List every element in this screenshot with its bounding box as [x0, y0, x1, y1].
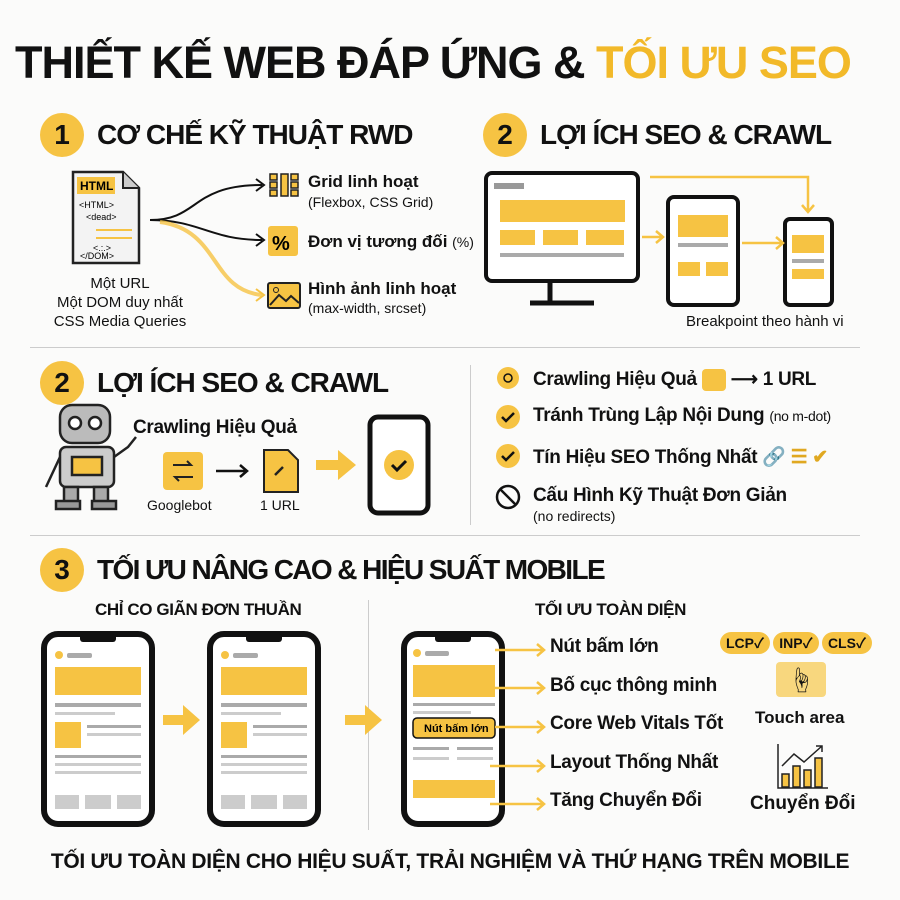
benefits list: Tín Hiệu SEO Thống Nhất 🔗 ☰ ✔ [533, 447, 828, 468]
chart icon [777, 744, 828, 789]
phones comparison: Nút bấm lớn [424, 723, 489, 735]
subheadings: CHỈ CO GIÃN ĐƠN THUẦN [95, 600, 301, 619]
text: 1 URL [260, 497, 300, 513]
section 1 caption [54, 275, 186, 330]
feature labels: Tăng Chuyển Đổi [550, 790, 702, 811]
googlebot icon [163, 452, 203, 490]
feature labels: Nút bấm lớn [550, 636, 658, 657]
icon: html document: </DOM> [80, 251, 114, 261]
icon: html document: HTML [80, 179, 113, 193]
icon image [268, 283, 300, 308]
benefits list: Tránh Trùng Lập Nội Dung (no m-dot) [533, 405, 831, 426]
benefits list: Crawling Hiệu Quả ⟶ 1 URL [533, 369, 816, 390]
breakpoint caption: Breakpoint theo hành vi [686, 313, 844, 330]
feature labels: Core Web Vitals Tốt [550, 713, 723, 734]
icon: html document: <.:.> [93, 243, 111, 253]
section 3 heading [40, 548, 605, 592]
rwd items: (Flexbox, CSS Grid) [308, 194, 433, 210]
section 1 caption: CSS Media Queries [54, 313, 186, 330]
section 1 heading: CƠ CHẾ KỸ THUẬT RWD [97, 119, 412, 150]
rwd items: Hình ảnh linh hoạt [308, 279, 456, 298]
feature labels [550, 636, 724, 811]
devices [484, 171, 834, 307]
text: Crawling Hiệu Quả [133, 417, 297, 438]
benefits list: Cấu Hình Kỹ Thuật Đơn Giản [533, 485, 787, 506]
feature arrows [490, 643, 546, 811]
metrics pills: LCP✓ [726, 635, 764, 651]
section 2 heading left: LỢI ÍCH SEO & CRAWL [97, 367, 388, 398]
touch icon: ☝ [788, 666, 814, 696]
text: Chuyển Đổi [750, 793, 856, 814]
section 2 heading right: LỢI ÍCH SEO & CRAWL [540, 119, 831, 150]
url doc icon [264, 450, 298, 492]
metrics pills: CLS✓ [828, 635, 866, 651]
rwd items: Đơn vị tương đối (%) [308, 232, 474, 251]
phone check [370, 417, 428, 513]
section 2 heading left: 2 [54, 367, 70, 398]
phones comparison [41, 631, 505, 827]
crawl diagram [44, 404, 430, 516]
text: Googlebot [147, 497, 212, 513]
text: Touch area [755, 708, 844, 727]
benefits list: (no redirects) [533, 508, 615, 524]
section 1 caption: Một DOM duy nhất [57, 294, 183, 311]
rwd items: (max-width, srcset) [308, 300, 426, 316]
section 2 heading right [483, 113, 832, 157]
big arrow [316, 450, 356, 480]
icon percent: % [272, 233, 290, 255]
section 2 heading left [40, 361, 388, 405]
footer: TỐI ƯU TOÀN DIỆN CHO HIỆU SUẤT, TRẢI NGHIỆM VÀ THỨ HẠNG TRÊN MOBILE [51, 850, 849, 873]
section 3 heading: 3 [54, 554, 70, 585]
icon: html document: <dead> [86, 212, 117, 222]
section 1 diagram [72, 170, 301, 309]
icon grid [270, 174, 298, 196]
robot [46, 405, 136, 509]
touch icon [776, 662, 826, 697]
section 2 heading right: 2 [497, 119, 513, 150]
title: THIẾT KẾ WEB ĐÁP ỨNG & TỐI ƯU SEO [15, 37, 851, 88]
arrows [150, 179, 264, 301]
metrics pills [720, 632, 872, 654]
section 1 heading: 1 [54, 119, 70, 150]
benefits list [496, 367, 831, 524]
icon percent [268, 226, 298, 256]
feature labels: Bố cục thông minh [550, 675, 717, 696]
rwd items: Grid linh hoạt [308, 172, 418, 191]
metrics pills: INP✓ [779, 635, 813, 651]
section 1 heading [40, 113, 412, 157]
feature labels: Layout Thống Nhất [550, 752, 718, 773]
section 3 heading: TỐI ƯU NÂNG CAO & HIỆU SUẤT MOBILE [97, 554, 604, 585]
icon: html document [73, 172, 139, 263]
rwd items [308, 172, 474, 316]
icon: html document: <HTML> [79, 200, 114, 210]
section 1 caption: Một URL [90, 275, 150, 292]
text: TỐI ƯU TOÀN DIỆN [535, 600, 686, 619]
